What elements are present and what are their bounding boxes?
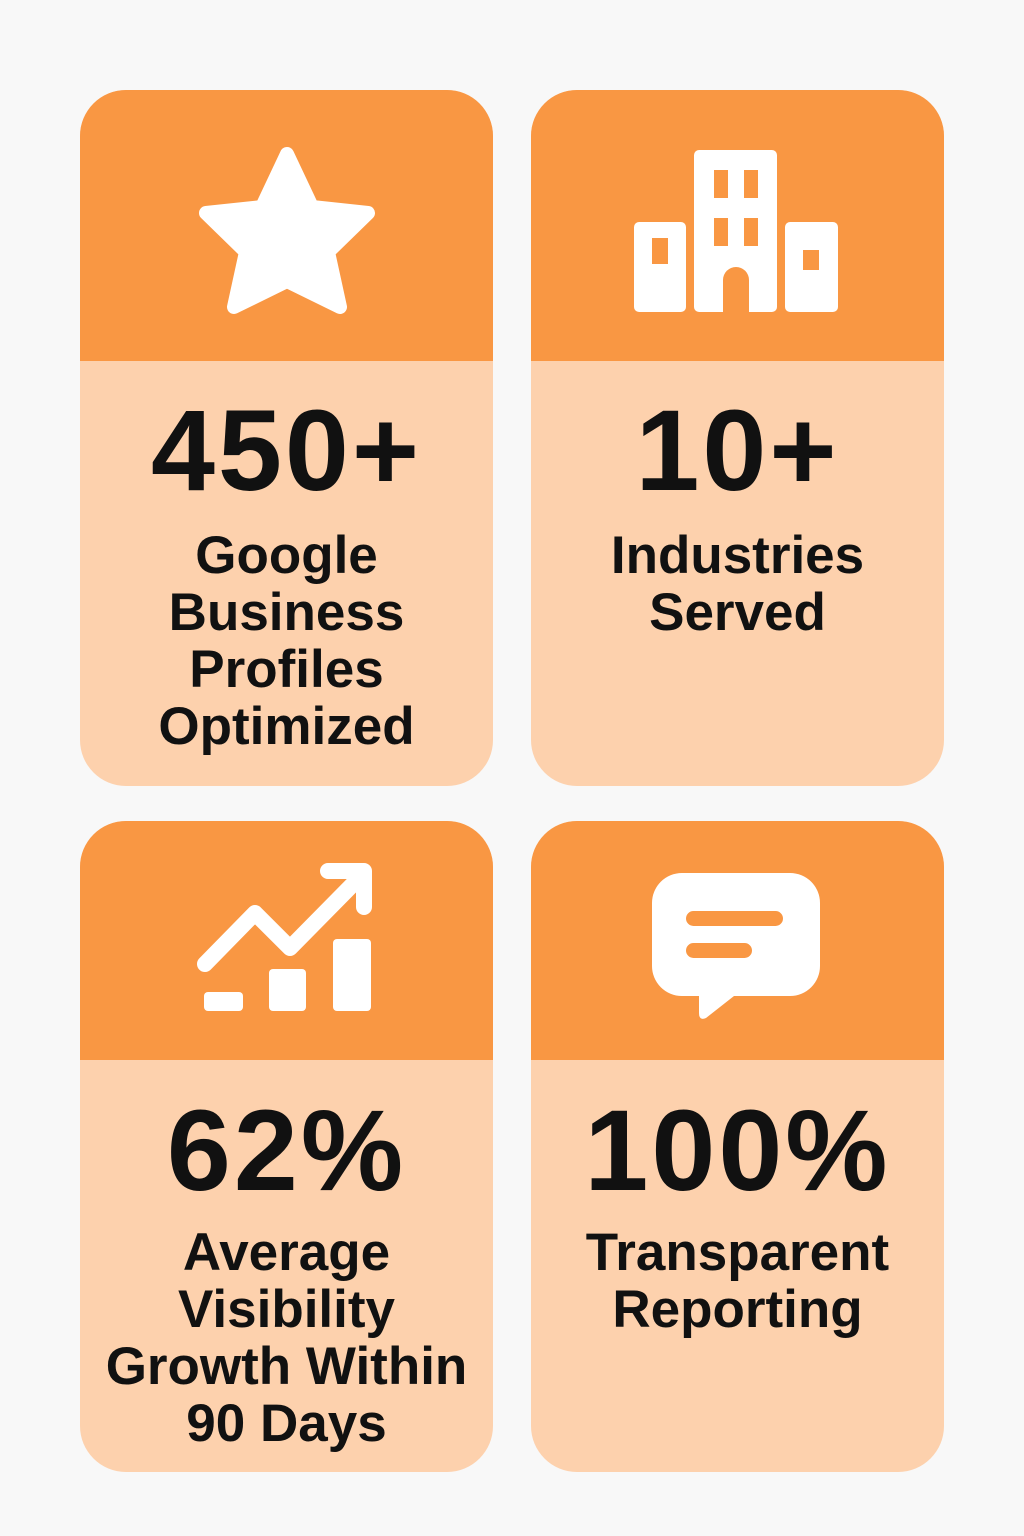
label: Profiles: [189, 640, 384, 699]
label: Reporting: [612, 1280, 863, 1339]
panel: google profiles: [80, 90, 493, 786]
label: [611, 526, 864, 642]
label: Served: [649, 583, 826, 642]
label: [106, 1223, 467, 1453]
panel: transparent reporting: [531, 821, 944, 1472]
number: 62%: [167, 1087, 406, 1215]
number: 100%: [584, 1087, 891, 1215]
icon: chat bubble header: [531, 821, 944, 1060]
number: 10+: [635, 387, 840, 515]
label: Transparent: [586, 1223, 889, 1282]
icon: star header: [80, 90, 493, 361]
label: Business: [169, 583, 404, 642]
label: Optimized: [158, 697, 415, 756]
panel: visibility growth: [80, 821, 493, 1472]
label: Industries: [611, 526, 864, 585]
panel: industries: [531, 90, 944, 786]
number: 450+: [151, 387, 422, 515]
label: 90 Days: [186, 1394, 387, 1453]
label: [586, 1223, 889, 1339]
icon: buildings header: [531, 90, 944, 361]
label: Average: [183, 1223, 390, 1282]
icon: growth chart header: [80, 821, 493, 1060]
label: [158, 526, 415, 756]
label: Google: [195, 526, 378, 585]
label: Visibility: [178, 1280, 395, 1339]
label: Growth Within: [106, 1337, 467, 1396]
